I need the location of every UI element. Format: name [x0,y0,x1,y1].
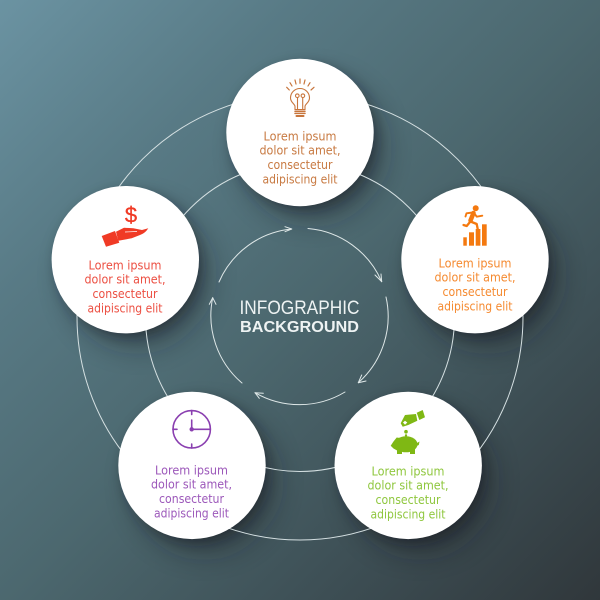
text: dolor sit amet, [368,478,448,493]
text: dolor sit amet, [260,143,340,158]
panel: bottom left [118,392,266,539]
icon: runner on bars [463,205,487,246]
text: adipiscing elit [370,506,446,521]
wide circle shadows [67,78,557,551]
text: dolor sit amet, [151,477,232,492]
arrow 1 [308,228,382,282]
text: consectetur [92,286,158,301]
text: adipiscing elit [262,172,338,186]
text: Lorem ipsum [264,128,336,143]
text: consectetur [442,284,508,299]
text: dolor sit amet, [84,272,166,287]
panel: left [52,186,199,333]
icon: piggy bank and hand [391,410,425,454]
panel: right [401,186,549,333]
icon: hand with dollar [102,202,148,247]
text: Lorem ipsum [438,255,512,270]
icon: light bulb [287,79,314,116]
text: adipiscing elit [88,300,163,315]
title line 1: INFOGRAPHIC [240,297,360,319]
text [260,128,340,186]
text: dolor sit amet, [434,270,516,285]
outer ring [77,94,523,540]
tight circle shadows [57,65,551,542]
text: Lorem ipsum [155,462,228,477]
center cycle arrows [209,227,388,405]
arrow 4 [209,298,242,383]
center title [240,297,360,336]
icon: hand with dollar: $ [125,202,137,228]
arrow 2 [358,297,388,383]
text: consectetur [268,157,333,172]
inner ring [146,162,454,472]
arrow 3 [255,392,345,405]
arrow 5 [219,227,292,282]
text [84,257,166,315]
text [368,463,448,521]
text [434,255,516,314]
title line 2: BACKGROUND [240,319,359,336]
panel: bottom right [334,392,482,539]
panel: top [226,59,374,206]
text: Lorem ipsum [372,463,444,478]
text: consectetur [159,491,225,506]
text: Lorem ipsum [88,257,162,272]
text: consectetur [376,492,441,507]
text: adipiscing elit [154,506,229,520]
text: adipiscing elit [438,298,513,314]
text [151,462,232,520]
icon: clock [173,411,210,448]
